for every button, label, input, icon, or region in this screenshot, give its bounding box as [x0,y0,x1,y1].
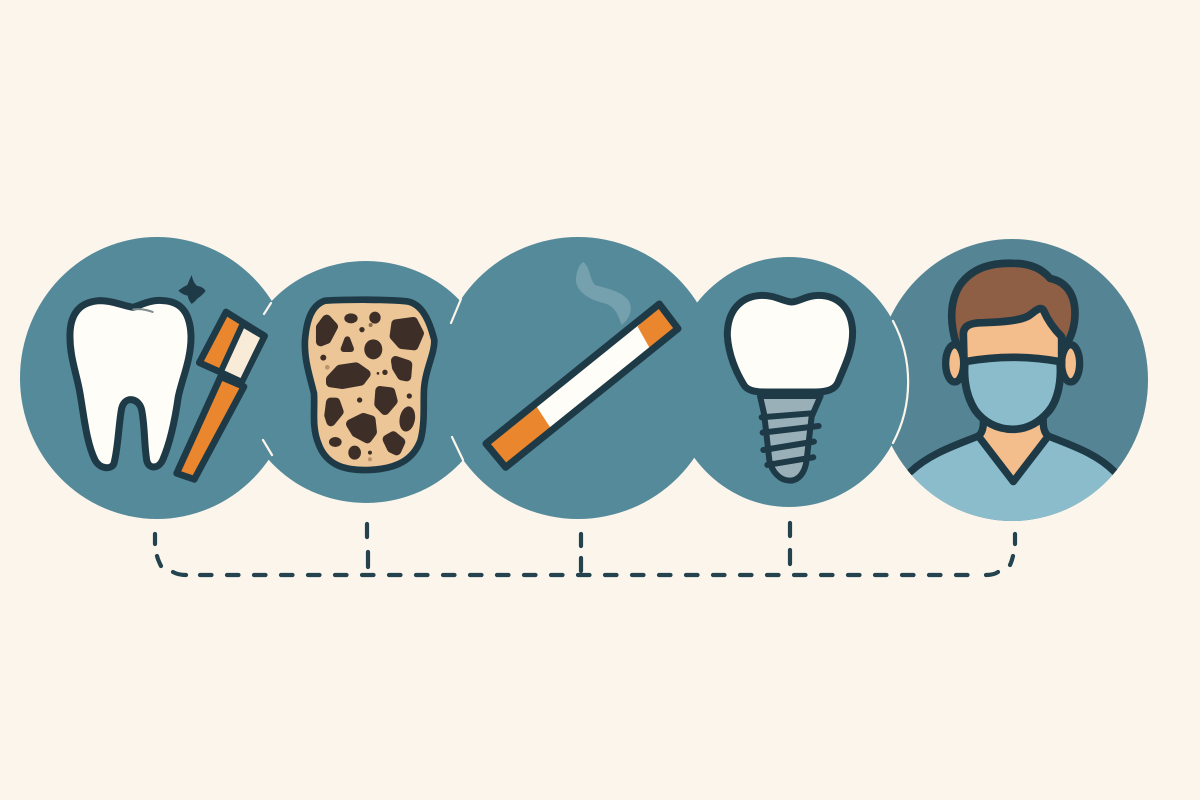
crown highlight [133,309,153,312]
icon: porous bone [305,300,434,470]
panel: cigarette circle [437,237,719,519]
drop 1 [155,534,161,566]
collar and shoulders [911,420,1114,482]
scrubs shirt [910,440,1114,521]
drop 2 [367,524,368,567]
filter end [486,407,551,467]
face [963,309,1062,363]
screw threads [762,413,819,465]
handle [177,377,244,479]
connector: dashed timeline [155,523,1015,575]
surgical mask [965,357,1060,429]
implant screw [760,396,821,481]
icon: sparkle star [178,275,206,304]
brush head [199,312,265,382]
neck [983,424,1044,476]
hair [952,263,1075,350]
cigarette outline [486,304,678,467]
main dashed line [200,573,978,577]
left corner [173,572,186,575]
panel: bone circle [239,261,493,503]
drop 5 [1010,534,1015,565]
icon: tooth [70,300,191,468]
panel: person with mask background circle [876,239,1148,521]
icon: cigarette [486,304,678,467]
drop 3 [579,534,583,571]
implant crown [727,295,853,392]
burning tip [638,304,678,349]
icon: toothbrush [177,312,265,479]
right ear [1062,345,1080,382]
drop 4 [788,523,792,564]
bristles [221,324,264,382]
panel: tooth circle [20,237,294,519]
icon: dental implant [727,295,853,481]
icon: smoke wisp [576,262,631,325]
icon: person wearing surgical mask [910,263,1115,530]
panel: implant circle [670,257,908,507]
left ear [946,345,964,382]
right corner [986,572,998,575]
seams between circles [263,299,908,460]
